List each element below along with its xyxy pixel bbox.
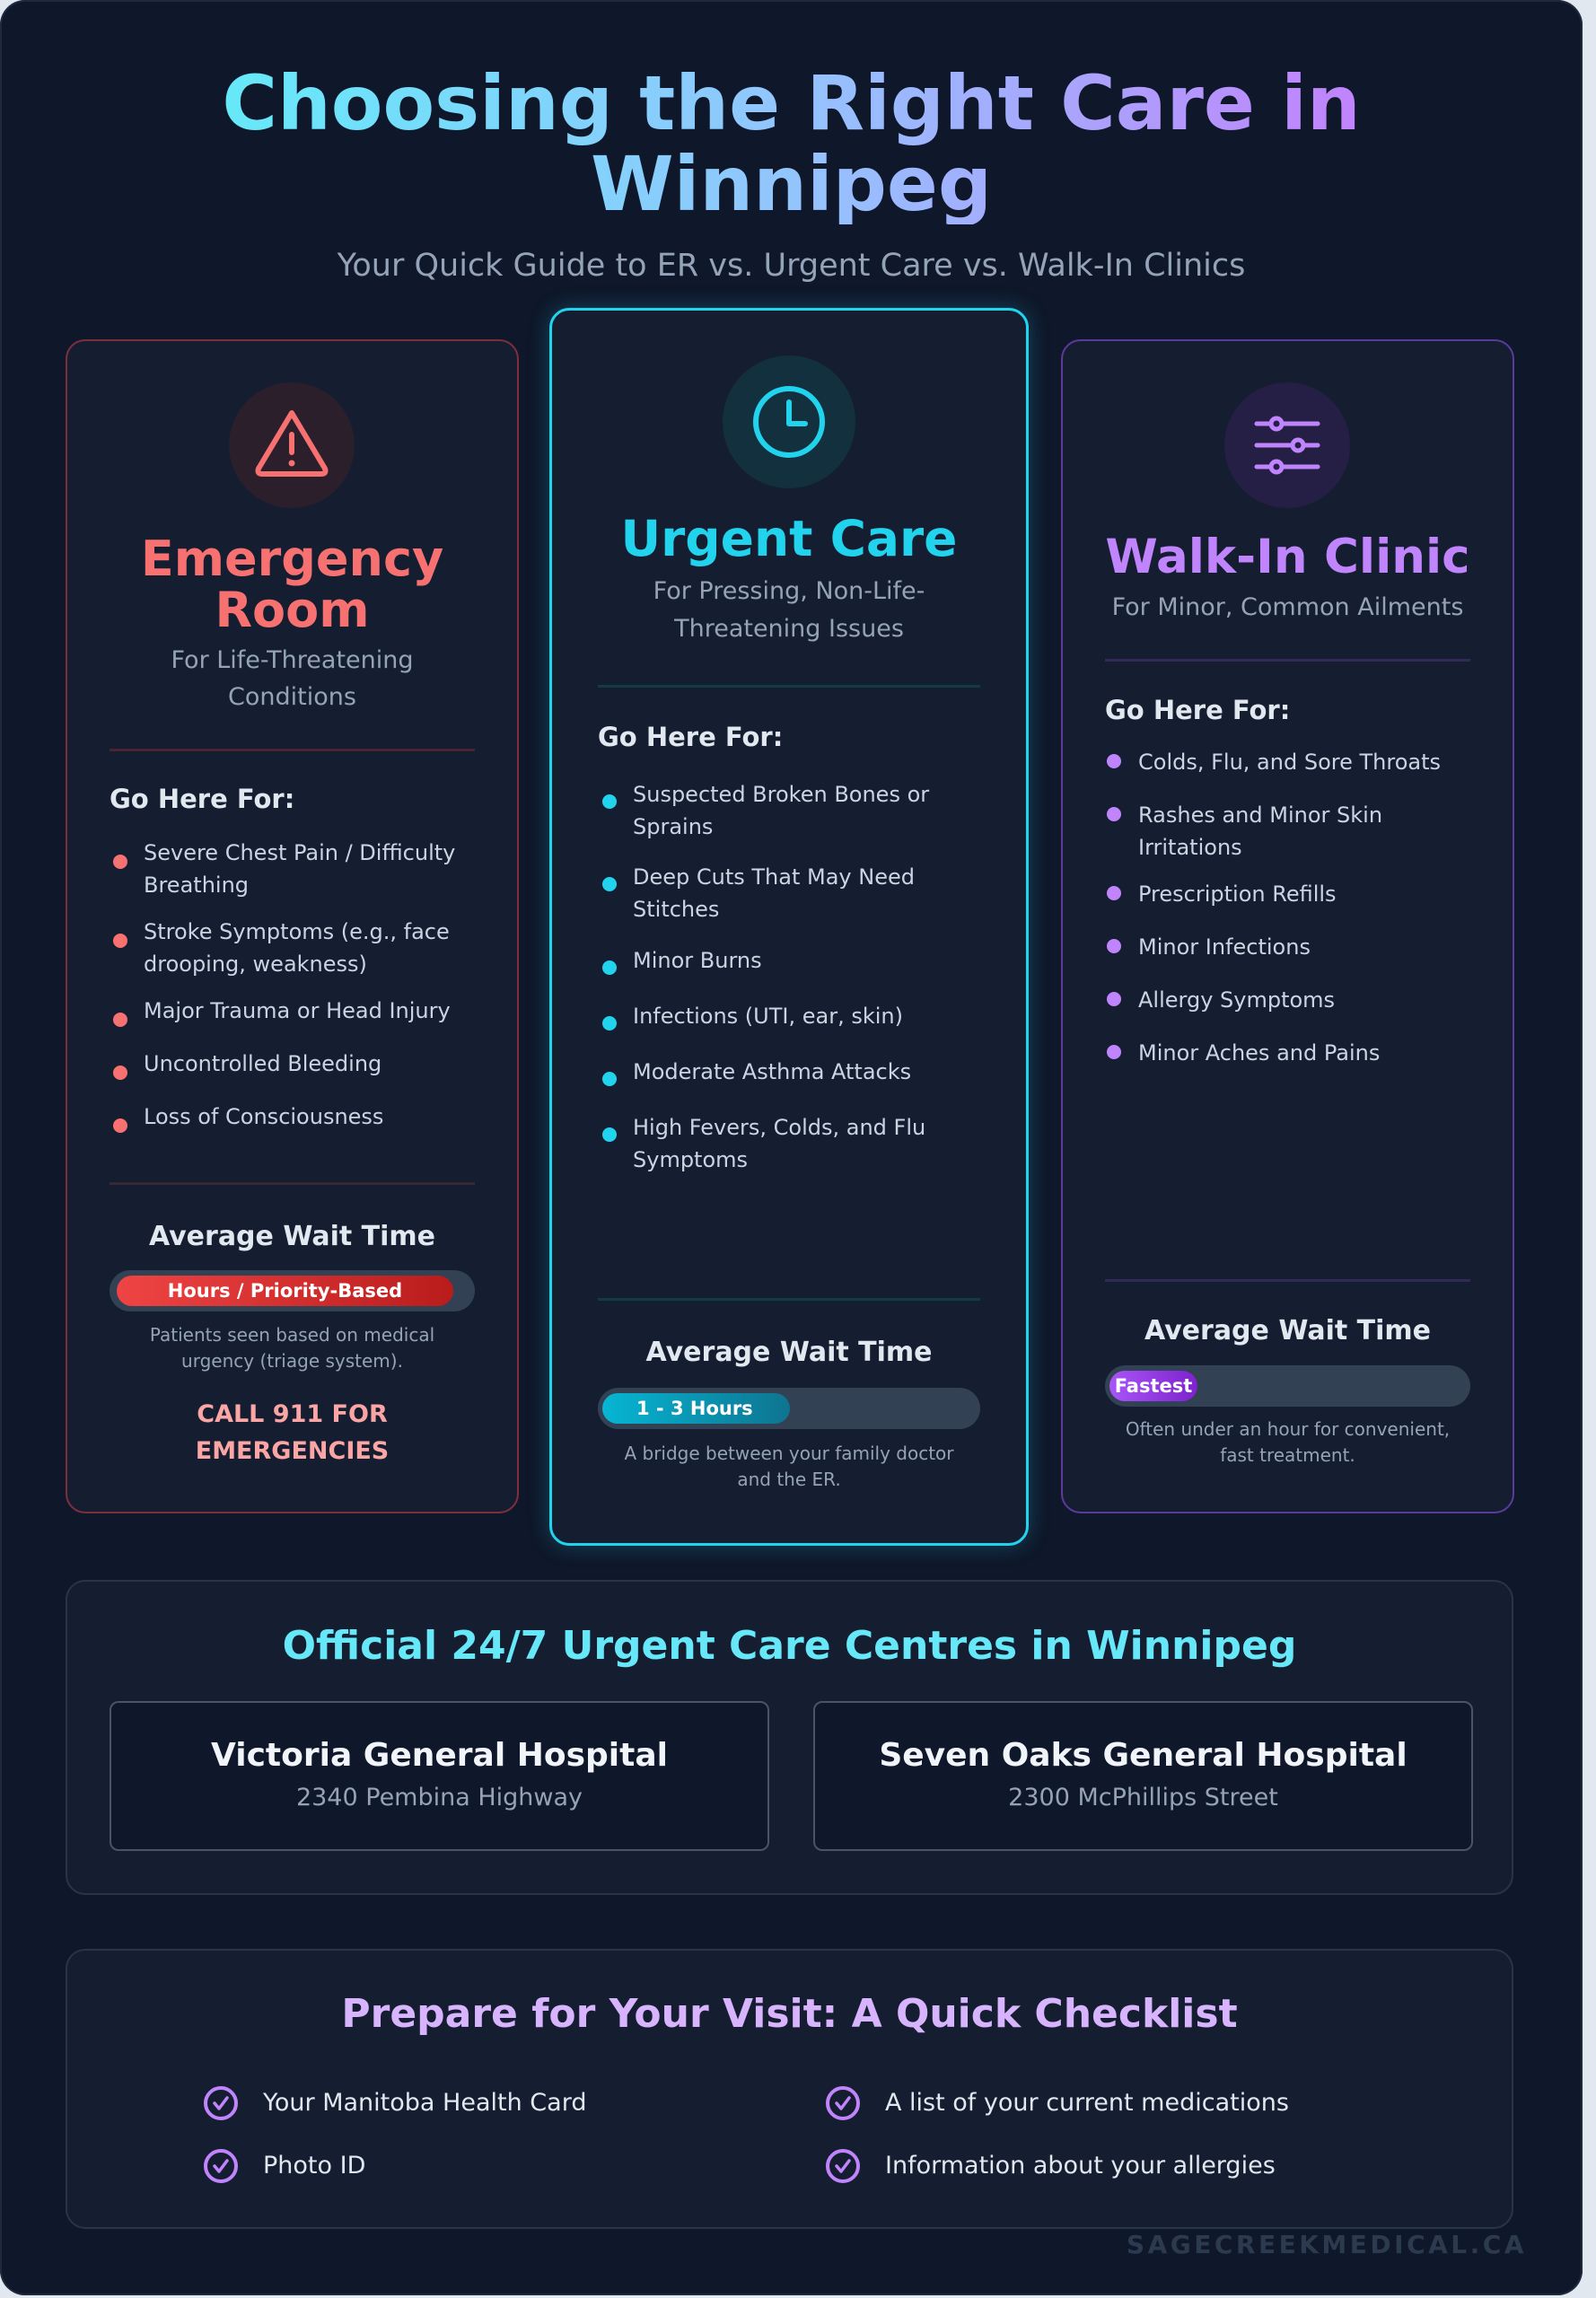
text block: subtitle: Threatening Issues: [674, 615, 904, 643]
subtitle: Your Quick Guide to ER vs. Urgent Care vs. Walk-In Clinics: [338, 248, 1245, 284]
wait time: walk-in: Average Wait Time: [1144, 1315, 1431, 1346]
list: go here for: Stroke Symptoms (e.g., face: [144, 919, 450, 944]
heading: Prepare for Your Visit: A Quick Checklist: [341, 1991, 1238, 2037]
icon: sliders: [1224, 382, 1350, 508]
checklist items: Your Manitoba Health Card: [263, 2089, 586, 2117]
list: go here for: Go Here For:: [598, 722, 783, 752]
heading: Urgent Care: [621, 510, 957, 567]
text block: subtitle: For Life-Threatening: [171, 646, 414, 674]
wait time: walk-in: Often under an hour for convenient,: [1126, 1418, 1450, 1440]
list: go here for: Symptoms: [633, 1147, 748, 1172]
list: go here for: Sprains: [633, 814, 713, 839]
list: go here for: Deep Cuts That May Need: [633, 864, 915, 890]
list: go here for: Prescription Refills: [1138, 881, 1337, 907]
wait time: urgent: Average Wait Time: [645, 1337, 933, 1368]
list: go here for: Uncontrolled Bleeding: [144, 1051, 381, 1076]
wait time: walk-in: [1105, 1315, 1470, 1466]
list: go here for: Go Here For:: [1105, 695, 1290, 725]
location: seven oaks: Seven Oaks General Hospital: [879, 1737, 1407, 1774]
wait time: ER: Patients seen based on medical: [150, 1324, 434, 1346]
list: go here for: Breathing: [144, 873, 249, 898]
icon: clock: [723, 355, 855, 488]
wait time: ER: Average Wait Time: [149, 1221, 435, 1252]
checklist items: A list of your current medications: [885, 2089, 1289, 2117]
list: go here for: Severe Chest Pain / Difficulty: [144, 840, 455, 865]
panel: urgent care: [549, 308, 1029, 1546]
wait time: ER: CALL 911 FOR: [197, 1400, 388, 1428]
list: go here for: Suspected Broken Bones or: [633, 782, 929, 807]
title: [0, 63, 1583, 224]
panel: checklist: [66, 1949, 1513, 2229]
list: go here for: [598, 722, 930, 1172]
list: go here for: [110, 784, 455, 1133]
title: Choosing the Right Care in: [222, 59, 1361, 147]
heading: Walk-In Clinic: [1105, 530, 1470, 584]
wait time: urgent: [598, 1337, 980, 1490]
list: go here for: Moderate Asthma Attacks: [633, 1059, 911, 1084]
wait time: urgent: 1 - 3 Hours: [636, 1398, 753, 1419]
list: go here for: Rashes and Minor Skin: [1138, 803, 1382, 828]
list: go here for: High Fevers, Colds, and Flu: [633, 1115, 925, 1140]
list: go here for: Allergy Symptoms: [1138, 987, 1335, 1013]
text block: subtitle: For Minor, Common Ailments: [1112, 593, 1463, 621]
list: go here for: Irritations: [1138, 835, 1242, 860]
title: Winnipeg: [591, 140, 992, 228]
list: go here for: Go Here For:: [110, 784, 294, 814]
wait time: urgent: A bridge between your family doctor: [624, 1443, 954, 1464]
wait time: ER: urgency (triage system).: [181, 1350, 403, 1372]
panel: walk-in clinic: [1061, 339, 1514, 1513]
location: victoria: [110, 1701, 769, 1851]
text block: subtitle: [171, 646, 414, 711]
list: go here for: Major Trauma or Head Injury: [144, 998, 451, 1023]
location: victoria: Victoria General Hospital: [211, 1737, 668, 1774]
list: go here for: [1105, 695, 1441, 1066]
checklist items: Photo ID: [263, 2152, 365, 2180]
wait time: ER: Hours / Priority-Based: [168, 1280, 402, 1302]
list: go here for: Colds, Flu, and Sore Throats: [1138, 750, 1441, 775]
list: go here for: Loss of Consciousness: [144, 1104, 383, 1129]
panel: emergency room: [66, 339, 519, 1513]
heading: Emergency: [141, 531, 443, 587]
text block: subtitle: Conditions: [228, 683, 356, 711]
heading: Room: [215, 582, 370, 638]
panel: urgent care centres: [66, 1580, 1513, 1895]
list: go here for: Stitches: [633, 897, 719, 922]
checklist items: [204, 2086, 1289, 2183]
footer brand: SAGECREEKMEDICAL.CA: [1127, 2230, 1527, 2259]
heading: [141, 531, 443, 638]
icon: warning: [229, 382, 355, 508]
list: go here for: Minor Aches and Pains: [1138, 1040, 1380, 1066]
checklist items: Information about your allergies: [885, 2152, 1276, 2180]
wait time: walk-in: Fastest: [1115, 1375, 1192, 1397]
wait time: ER: [110, 1221, 475, 1465]
list: go here for: Minor Infections: [1138, 934, 1311, 960]
text block: subtitle: For Pressing, Non-Life-: [653, 577, 925, 605]
list: go here for: Minor Burns: [633, 948, 762, 973]
wait time: walk-in: fast treatment.: [1220, 1444, 1355, 1466]
wait time: ER: EMERGENCIES: [196, 1437, 389, 1465]
location: seven oaks: [813, 1701, 1473, 1851]
text block: subtitle: [653, 577, 925, 643]
location: seven oaks: 2300 McPhillips Street: [1008, 1784, 1278, 1811]
wait time: urgent: and the ER.: [737, 1469, 841, 1490]
heading: Official 24/7 Urgent Care Centres in Winnipeg: [283, 1623, 1296, 1669]
list: go here for: drooping, weakness): [144, 952, 367, 977]
location: victoria: 2340 Pembina Highway: [296, 1784, 583, 1811]
list: go here for: Infections (UTI, ear, skin): [633, 1004, 903, 1029]
